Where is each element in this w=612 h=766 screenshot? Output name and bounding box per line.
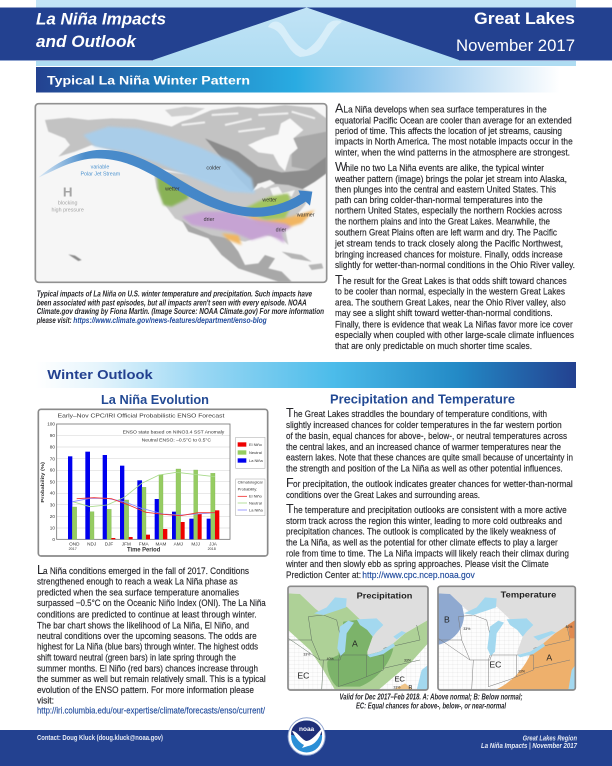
map labels: H	[63, 185, 72, 200]
plot notes: ENSO state based on NINO3.4 SST Anomaly	[123, 429, 225, 434]
map labels: blocking	[58, 200, 77, 206]
labels: EC	[297, 671, 309, 681]
title: and Outlook	[36, 32, 138, 51]
land: Alaska and Canada	[44, 104, 326, 174]
legend: bars: La Niña	[249, 458, 264, 463]
text block: La Niña evolution: The bar chart shows the likelihood of La Niña, El Niño, and	[37, 620, 249, 630]
area: above-normal	[496, 620, 574, 690]
text block: precipitation and temperature	[285, 406, 573, 580]
bars: neutral	[72, 469, 215, 539]
title: La Niña Impacts	[36, 10, 166, 28]
axis labels: 0	[52, 537, 55, 542]
heading: Precipitation and Temperature: Precipitation and Temperature	[330, 392, 515, 406]
text block: La Niña explanation: area. The southern Great Lakes, near the Ohio River valley, also	[335, 297, 566, 307]
title	[36, 10, 166, 51]
labels: 33%	[463, 627, 470, 631]
text block: La Niña explanation: impacts in North America. The most notable impacts occur in the	[335, 137, 573, 147]
chart: ENSO probabilistic forecast: MJJ	[191, 541, 200, 546]
area: below-normal	[438, 594, 464, 645]
section bar: Typical La Niña Winter Pattern: Typical La Niña Winter Pattern	[47, 74, 250, 88]
chart: ENSO probabilistic forecast: MAM	[156, 541, 167, 546]
labels: EC	[489, 659, 501, 669]
region: wetter, west	[157, 173, 188, 207]
Hudson Bay	[248, 118, 303, 171]
legend: climatology: Probability:	[238, 487, 257, 492]
region: wetter, east	[242, 193, 292, 220]
text block: La Niña explanation: period of time. This affects the location of jet streams, causing	[335, 126, 562, 136]
axis labels: 40	[50, 491, 55, 496]
axis labels: 90	[50, 433, 55, 438]
labels: 33%	[518, 670, 525, 674]
maps caption: Valid for Dec 2017–Feb 2018. A: Above normal; B: Below normal;	[340, 692, 523, 702]
text block: precipitation and temperature: precipitation chances. The outlook is complicated by the likely weakness of	[286, 527, 556, 537]
section bar: Winter Outlook: Winter Outlook	[47, 367, 153, 382]
axis labels: 20	[50, 514, 55, 519]
icon: NOAA logo: noaa	[299, 726, 315, 733]
land: Canada	[438, 587, 574, 655]
labels: A	[546, 653, 552, 663]
text block: precipitation and temperature: http://www.cpc.ncep.noaa.gov	[362, 570, 475, 580]
land: Canada	[288, 587, 428, 654]
map: typical La Niña winter pattern	[35, 104, 327, 282]
icon: NOAA logo	[288, 718, 325, 755]
land: Caribbean	[282, 252, 323, 270]
legend: climatology: Climatological	[238, 480, 263, 485]
text block: La Niña evolution: predicted when the sea surface temperature anomalies	[37, 587, 239, 597]
header banner	[0, 0, 612, 66]
labels: B	[408, 685, 412, 691]
labels: A	[352, 639, 358, 649]
labels: 33%	[393, 686, 400, 690]
region: warmer, orange fringe	[222, 210, 315, 245]
land: dark eastern Canada	[205, 138, 326, 192]
text block: precipitation and temperature: winter and then slowly ebb as spring approaches. Please visit the Climate	[285, 559, 549, 569]
land: United States	[153, 170, 312, 245]
map caption	[36, 290, 324, 325]
axis labels: 100	[47, 422, 55, 427]
arrow: polar jet stream	[38, 150, 312, 217]
plot notes	[123, 429, 225, 443]
text block: La Niña evolution: a Niña conditions emerged in the fall of 2017. Conditions	[43, 566, 249, 576]
state borders	[288, 615, 420, 690]
text block: precipitation and temperature: role from time to time. The La Niña impacts will likely reach their climax during	[286, 548, 569, 558]
chart: ENSO probabilistic forecast: JJA	[209, 541, 218, 546]
chart: ENSO probabilistic forecast: FMA	[139, 541, 149, 546]
axis labels	[47, 422, 55, 542]
map caption: https://www.climate.gov/news-features/department/enso-blog	[73, 316, 267, 325]
chart: ENSO probabilistic forecast	[38, 409, 268, 556]
arctic channels	[182, 112, 315, 132]
text block: precipitation and temperature: the La Niña, as well as the potential for other climate effects to play a larger	[286, 538, 558, 548]
climatology lines	[73, 472, 215, 516]
text block: precipitation and temperature: he temperature and precipitation outlooks are consistent with a more active	[294, 505, 567, 515]
text block: La Niña explanation: northern United States, especially the northern Rockies across	[335, 206, 562, 216]
text block: La Niña explanation: La Niña develops when sea surface temperatures in the	[344, 104, 547, 114]
text block: La Niña evolution: evolution of the ENSO pattern. For more information please	[37, 685, 254, 695]
plot gridlines	[57, 436, 230, 528]
chart: ENSO probabilistic forecast: JFM	[122, 541, 131, 546]
text block: La Niña explanation: equatorial Pacific Ocean are cooler than average for an extended	[335, 115, 572, 125]
labels: Precipitation	[357, 590, 412, 600]
land: United States	[439, 606, 530, 689]
plot notes: Neutral ENSO: –0.5°C to 0.5°C	[142, 438, 211, 443]
axis labels: 60	[50, 468, 55, 473]
chart: ENSO probabilistic forecast: AMJ	[174, 541, 183, 546]
text block: La Niña explanation: winter, when the wind patterns in the atmosphere are strongest.	[334, 147, 570, 157]
legend: climatology: La Niña	[249, 507, 264, 512]
map labels: wetter	[165, 186, 180, 192]
chart: ENSO probabilistic forecast: DJF	[105, 541, 113, 546]
text block: La Niña explanation: bringing increased chances for moisture. Finally, odds increase	[335, 249, 563, 259]
map labels: warmer	[297, 213, 315, 219]
footer region and date: Great Lakes Region	[523, 734, 577, 742]
text block: La Niña explanation: slightly for wetter-than-normal conditions in the Ohio River valley.	[335, 260, 575, 270]
map caption: please visit:	[36, 316, 72, 325]
text block: La Niña evolution: strengthened enough to reach a weak La Niña phase as	[37, 577, 238, 587]
map labels: drier	[276, 228, 287, 234]
labels: Temperature	[501, 590, 557, 600]
heading: La Niña Evolution: La Niña Evolution	[101, 392, 209, 407]
map labels	[52, 165, 315, 234]
region: drier	[182, 212, 292, 243]
map caption: Typical impacts of La Niña on U.S. winter temperature and precipitation. Such impacts have	[37, 290, 312, 298]
footer region and date: La Niña Impacts | November 2017	[481, 741, 578, 750]
text block: La Niña evolution: summer months. El Niño (red bars) chances increase through	[37, 663, 258, 673]
map: precipitation outlook	[288, 586, 428, 691]
text block: La Niña evolution: visit:	[37, 696, 54, 706]
text block: La Niña explanation: then plunges into the central and eastern United States. This	[335, 184, 556, 194]
text block: La Niña explanation: jet stream tends to track closely along the Pacific Northwest,	[334, 238, 563, 248]
labels: B	[444, 615, 450, 625]
text block: precipitation and temperature: F	[286, 476, 294, 490]
text block: La Niña evolution: conditions are predicted to continue at least through winter.	[37, 609, 257, 619]
text block: La Niña evolution: http://iri.columbia.edu/our-expertise/climate/forecasts/enso/current/	[37, 706, 265, 716]
axis labels: 50	[50, 479, 55, 484]
chart: ENSO probabilistic forecast: Early–Nov CPC/IRI Official Probabilistic ENSO Forecast	[58, 414, 225, 420]
chart: ENSO probabilistic forecast: 2018	[208, 547, 216, 551]
section bar: Winter Outlook	[36, 362, 576, 388]
map labels: variable	[91, 165, 109, 171]
text block: La Niña evolution: L	[37, 563, 44, 577]
text block: La Niña explanation: A	[335, 102, 344, 116]
text block: precipitation and temperature: or precipitation, the outlook indicates greater chances for wetter-than-normal	[293, 479, 573, 489]
region and date	[456, 10, 575, 55]
text block: La Niña explanation	[334, 102, 575, 351]
legend: climatology: El Niño	[249, 494, 263, 499]
text block: La Niña explanation: may see a slight shift toward wetter-than-normal conditions.	[335, 308, 553, 318]
text block: precipitation and temperature: Prediction Center at:	[286, 570, 361, 580]
contact: Contact: Doug Kluck (doug.kluck@noaa.gov)	[37, 733, 163, 742]
region: colder	[83, 127, 255, 193]
legend: climatology: Neutral	[249, 500, 262, 505]
labels: EC	[394, 674, 405, 683]
labels: 40%	[565, 625, 572, 629]
axis labels: 30	[50, 502, 55, 507]
text block: precipitation and temperature: he Great Lakes straddles the boundary of temperature conditions, with	[294, 409, 547, 419]
labels: 33%	[404, 658, 411, 662]
labels: 40%	[327, 657, 334, 661]
maps caption	[340, 692, 523, 710]
area: above-normal 40%	[327, 619, 393, 687]
legend: climatology	[236, 479, 265, 516]
text block: La Niña evolution: surpassed −0.5°C on the Oceanic Niño Index (ONI). The La Niña	[37, 598, 266, 608]
text block: precipitation and temperature: eastern lakes. Note that these chances are quite small because of uncertainty in	[286, 452, 573, 462]
text block: La Niña evolution: highest for La Niña (blue bars) through winter. The highest odds	[37, 642, 258, 652]
map labels: Polar Jet Stream	[80, 172, 121, 178]
legend: bars	[236, 437, 265, 468]
footer region and date	[481, 734, 578, 750]
maps caption: EC: Equal chances for above-, below-, or near-normal	[356, 702, 507, 710]
text block: La Niña evolution: neutral conditions over the upcoming seasons. The odds are	[37, 631, 257, 641]
legend: bars: El Niño	[249, 442, 263, 447]
area: above-normal 33%	[288, 586, 428, 690]
text block: La Niña explanation: W	[335, 160, 347, 174]
map caption: been associated with past episodes, but all impacts aren't seen with every episode. NOAA	[37, 298, 307, 307]
state borders	[438, 615, 570, 690]
text block: La Niña evolution	[37, 563, 266, 716]
labels: 33%	[303, 652, 310, 656]
text block: La Niña explanation: Finally, there is evidence that weak La Niñas favor more ice cover	[335, 319, 573, 329]
footer	[0, 718, 612, 766]
text block: La Niña evolution: the summer as well but remain relatively small. This is a typical	[37, 674, 266, 684]
icon: bird watermark	[268, 20, 342, 57]
text block: La Niña explanation: weather pattern (image) brings the polar jet stream into Alaska,	[334, 174, 567, 184]
text block: precipitation and temperature: T	[286, 406, 294, 420]
text block: precipitation and temperature: T	[286, 502, 294, 516]
map caption: Climate.gov drawing by Fiona Martin. (Image Source: NOAA Climate.gov) For more information	[37, 307, 324, 316]
text block: La Niña explanation: he result for the Great Lakes is that odds shift toward chances	[342, 276, 567, 286]
chart: ENSO probabilistic forecast: 2017	[69, 547, 77, 551]
axis labels: 70	[50, 456, 55, 461]
land: United States	[288, 631, 428, 689]
text block: La Niña explanation: hile no two La Niña events are alike, the typical winter	[346, 163, 544, 173]
chart: ENSO probabilistic forecast: NDJ	[87, 541, 96, 546]
map labels: drier	[204, 217, 215, 223]
region and date: November 2017	[456, 36, 575, 55]
legend: bars: Neutral	[249, 450, 262, 455]
axis labels: 80	[50, 445, 55, 450]
text block: La Niña explanation: that are only predictable on much shorter time scales.	[335, 341, 532, 351]
bars: La Niña	[68, 452, 211, 539]
labels	[444, 590, 572, 674]
text block: precipitation and temperature: slightly increased chances for colder temperatures in the far western portion	[286, 420, 562, 430]
text block: precipitation and temperature: conditions over the Great Lakes and surrounding areas.	[286, 490, 480, 500]
text block: La Niña explanation: to be cooler than normal, especially in the western Great Lakes	[335, 287, 565, 297]
map: temperature outlook	[438, 586, 575, 690]
chart: ENSO probabilistic forecast: Probability (%)	[40, 462, 46, 503]
axis labels: 10	[50, 525, 55, 530]
map labels: wetter	[262, 198, 277, 204]
Great Lakes	[464, 597, 575, 690]
text block: precipitation and temperature: of the basin, equal chances for above-, below-, or neutral temperatures across	[286, 431, 567, 441]
map labels: colder	[206, 166, 221, 172]
text block: La Niña evolution: shift toward neutral (green bars) in late spring through the	[37, 652, 236, 662]
bars: El Niño	[111, 510, 219, 539]
land: Mexico and Central America	[182, 220, 292, 282]
text block: La Niña explanation: the northern plains and into the Great Lakes. Meanwhile, the	[335, 216, 550, 226]
region and date: Great Lakes	[474, 10, 575, 28]
Great Lakes	[314, 597, 428, 690]
labels	[297, 590, 412, 691]
chart: ENSO probabilistic forecast: OND	[69, 541, 80, 546]
text block: precipitation and temperature: the strength and position of the La Niña as well as other potential influences.	[286, 463, 563, 473]
chart: ENSO probabilistic forecast: Time Period	[127, 548, 161, 554]
text block: precipitation and temperature: the central lakes, and an increased chance of warmer temperatures near the	[286, 442, 561, 452]
text block: La Niña explanation: path can bring colder-than-normal temperatures into the	[335, 195, 543, 205]
area: below normal, southeast	[394, 684, 412, 690]
text block: La Niña explanation: especially when coupled with other large-scale climate influences	[335, 330, 574, 340]
text block: precipitation and temperature: storm track across the region this winter, leading to more cold outbreaks and	[286, 516, 562, 526]
text block: La Niña explanation: T	[335, 273, 343, 287]
Great Lakes	[257, 180, 295, 197]
map labels: high pressure	[52, 208, 84, 214]
section bar: Typical La Niña Winter Pattern	[36, 67, 576, 92]
text block: La Niña explanation: southern Great Plains often are left warm and dry. The Pacific	[335, 227, 557, 237]
